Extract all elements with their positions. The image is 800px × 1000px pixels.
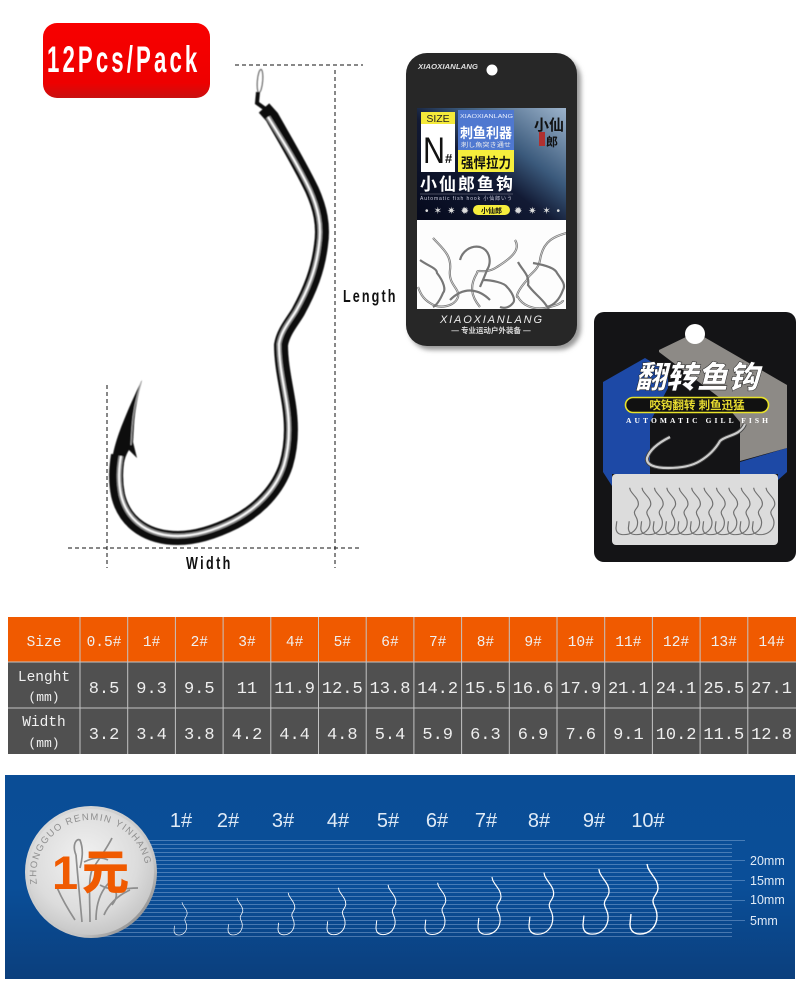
length row: 12.5 [322,680,363,699]
header row: 0.5# [87,635,122,651]
size numbers: 9# [583,810,606,832]
header row: 2# [191,635,208,651]
length row: 8.5 [89,680,119,699]
width row: 7.6 [565,726,596,745]
package window art: 刺し魚突き通せ [461,141,511,149]
package window art: # [445,151,453,166]
length row: 16.6 [513,680,554,699]
width row [22,715,792,751]
length row [18,670,792,705]
size table [8,617,796,754]
width row: 4.2 [232,726,262,745]
length row: 24.1 [656,680,697,699]
width row: 5.9 [422,726,453,745]
card footer brand: XIAOXIANLANG [439,314,542,326]
size numbers: 1# [170,810,193,832]
size numbers: 8# [528,810,551,832]
width row: 3.8 [184,726,215,745]
length row: 14.2 [417,680,458,699]
length row: 9.3 [136,680,167,699]
size numbers: 5# [377,810,400,832]
header row: 3# [238,635,256,651]
size numbers: 6# [426,810,449,832]
main hook illustration [110,69,322,538]
card title: 翻转鱼钩 [635,360,763,395]
length row: Lenght [18,670,70,686]
badge: 12Pcs/Pack [43,23,210,98]
width row: Width [22,715,66,731]
scale labels: 20mm [750,854,785,868]
package window art: SIZE [426,113,450,125]
scale labels: 5mm [750,914,778,928]
hooks inside package window [418,232,570,312]
width row: 5.4 [375,726,405,745]
package window art: Automatic fish hook 小仙郎いう [420,195,512,202]
scale labels [750,854,785,928]
width row: 12.8 [751,726,792,745]
header row: 5# [334,635,351,651]
size numbers [170,810,666,832]
width row: (mm) [28,736,60,751]
length row: 21.1 [608,680,649,699]
ruler lines [91,840,745,936]
package window art: ✹ ✷ ✶ • [514,206,560,217]
panel: actual size comparison [5,775,795,979]
coin [25,806,157,938]
length row: 15.5 [465,680,506,699]
badge: 12Pcs/Pack: 12Pcs/Pack [47,39,200,80]
width row: 3.4 [136,726,167,745]
package window art: 刺鱼利器 [460,125,512,141]
english subtitle: AUTOMATIC GILL FISH [626,416,768,425]
label: Width: Width [186,554,233,574]
card footer tagline: — 专业运动户外装备 — [451,325,531,335]
size numbers: 7# [475,810,498,832]
package window art [417,108,566,309]
package window art: 郎 [546,134,558,149]
size numbers: 4# [327,810,350,832]
card brand text: XIAOXIANLANG [417,64,479,71]
size numbers: 3# [272,810,295,832]
length row: (mm) [28,690,60,705]
label: Length: Length [343,287,398,307]
width row: 4.8 [327,726,358,745]
width row: 6.3 [470,726,501,745]
length row: 11 [237,680,257,699]
header row: 7# [429,635,447,651]
size numbers: 10# [631,810,666,832]
coin inscription: ZHONGGUO RENMIN YINHANG [30,813,151,884]
yellow pill subtitle: 咬钩翻转 刺鱼迅猛 [649,398,745,412]
length row: 13.8 [370,680,410,699]
header row: 9# [524,635,542,651]
yellow pill subtitle [626,398,768,412]
length row: 27.1 [751,680,792,699]
package window art: • ✶ ✷ ✹ [425,206,469,217]
header row: 11# [615,635,642,651]
header row: 10# [568,635,594,651]
width row: 10.2 [656,726,697,745]
orchid engraving [56,838,138,922]
hook drawing on card [647,424,745,468]
header row: 13# [711,635,737,651]
dimension lines [68,65,363,568]
package window art: 小仙郎 [481,206,502,215]
package window art: 小仙郎鱼钩 [420,174,513,194]
width row: 9.1 [613,726,644,745]
width row: 6.9 [518,726,548,745]
package: flip hook card [594,312,796,562]
scale labels: 10mm [750,893,785,907]
width row: 4.4 [279,726,310,745]
header row: Size [27,635,61,651]
hook scale silhouettes [174,864,658,935]
header row: 1# [143,635,161,651]
header row [27,635,785,651]
header row: 4# [286,635,304,651]
length row: 11.9 [274,680,315,699]
package window art: N [423,130,445,171]
header row: 12# [663,635,689,651]
width row: 3.2 [89,726,119,745]
length row: 9.5 [184,680,215,699]
header row: 14# [758,635,785,651]
hook tray with twelve hooks [612,474,778,545]
header row: 8# [477,635,494,651]
grey hexagon art [659,336,787,461]
package window art: 强悍拉力 [461,155,511,171]
package: XIAOXIANLANG black card [406,53,581,350]
size numbers: 2# [217,810,240,832]
package window art: 小仙 [534,117,564,134]
length row: 25.5 [703,680,744,699]
blue hexagon art [603,358,787,486]
coin value: 1元: 1元 [52,846,129,899]
length row: 17.9 [560,680,601,699]
width row: 11.5 [703,726,744,745]
scale labels: 15mm [750,874,785,888]
header row: 6# [381,635,399,651]
package window art: XIAOXIANLANG [460,114,513,120]
